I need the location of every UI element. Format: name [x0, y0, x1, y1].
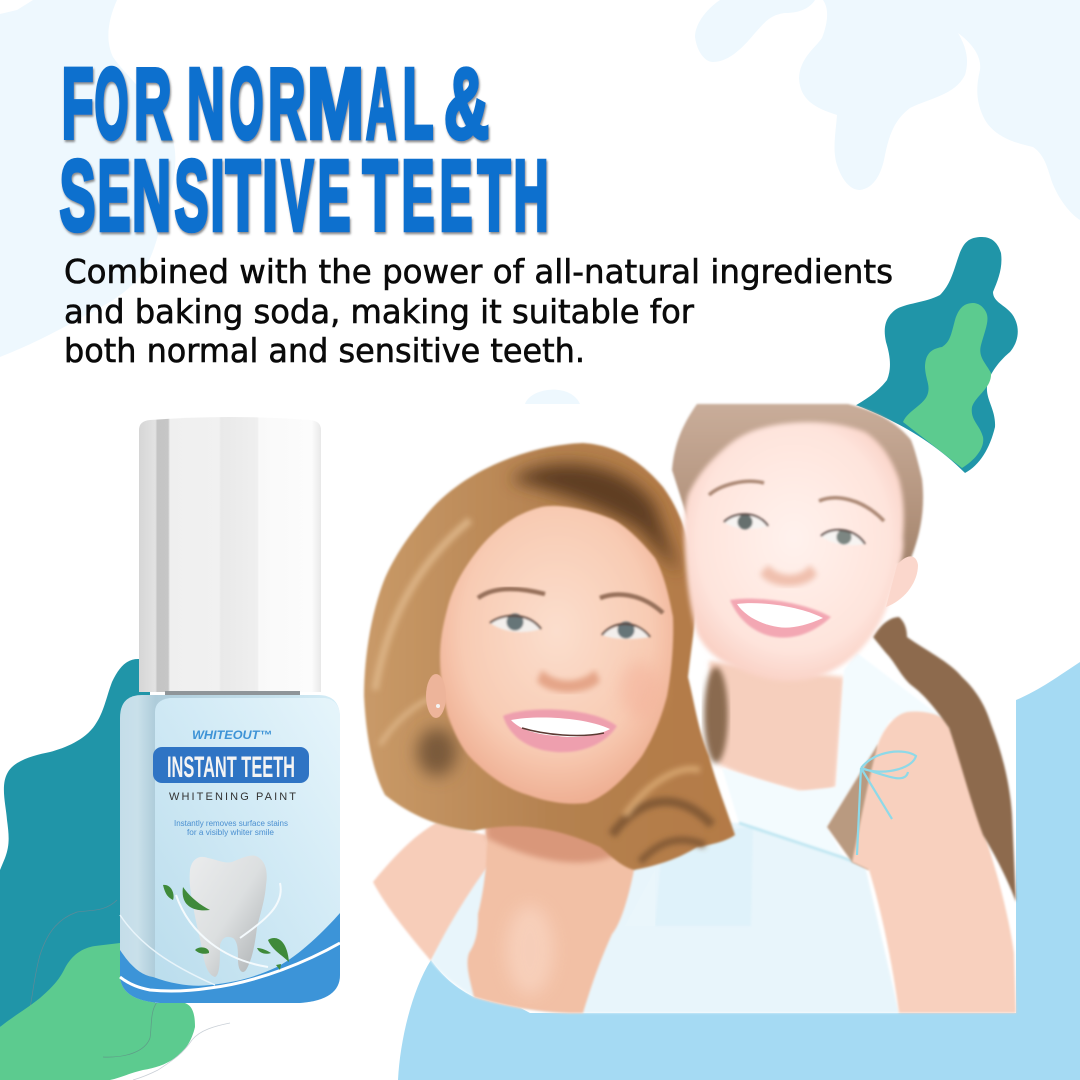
title line 1: N	[187, 48, 225, 160]
blob: green bottom left	[0, 943, 195, 1080]
child's hair	[672, 404, 923, 565]
child's eyes	[724, 514, 865, 545]
child's neck	[709, 661, 844, 795]
child's arm around mother	[373, 823, 492, 961]
title line 1: F	[62, 48, 94, 160]
label pill	[153, 747, 309, 783]
mother's eyes	[490, 614, 650, 639]
title line 1: O	[94, 48, 128, 160]
title line 2: S	[174, 140, 208, 252]
child's face	[684, 422, 904, 681]
title line 2: E	[402, 140, 434, 252]
body text	[64, 252, 893, 370]
child's teeth	[737, 603, 823, 628]
label heading: INSTANT TEETH	[167, 751, 295, 784]
brand name: WHITEOUT™	[192, 728, 272, 742]
bottle body	[120, 695, 340, 1003]
photo: mother and daughter	[360, 404, 1016, 1013]
title line 1	[62, 48, 489, 160]
title line 1: L	[402, 48, 434, 160]
mother's teeth	[511, 717, 610, 737]
title line 1: R	[134, 48, 172, 160]
thin lines on green blob	[103, 1002, 230, 1080]
child's arm	[852, 712, 1016, 1013]
label panel	[155, 698, 340, 1003]
chin shadow	[486, 800, 628, 863]
blob: light blue bottom right	[398, 662, 1080, 1080]
mother's ear	[426, 674, 446, 718]
title line 2	[60, 140, 548, 252]
label description	[174, 819, 288, 837]
neck highlight	[506, 905, 554, 995]
title line 2: V	[282, 140, 314, 252]
mother's cheek blush	[620, 662, 660, 718]
child's brows	[709, 481, 884, 521]
title	[60, 48, 548, 252]
background: pale blue blobs	[0, 0, 1080, 404]
title line 2: S	[60, 140, 96, 252]
thin line on teal blob	[15, 900, 117, 1040]
label description: Instantly removes surface stains	[174, 819, 288, 828]
title line 1: M	[307, 48, 364, 160]
text: H	[514, 140, 548, 252]
body text: Combined with the power of all-natural ingredients	[64, 252, 893, 291]
mother's brows	[478, 589, 663, 613]
mother's lips	[503, 709, 617, 752]
title line 2: T	[226, 140, 260, 252]
cap shadow line	[165, 691, 300, 695]
title line 2: N	[132, 140, 171, 252]
child's arm shadow	[827, 744, 880, 870]
title line 2: E	[98, 140, 130, 252]
swirl around tooth	[176, 883, 281, 967]
mother's hair	[364, 443, 735, 870]
mother's face	[440, 506, 673, 804]
icon: leaves	[163, 885, 289, 970]
title line 2: E	[440, 140, 472, 252]
shirt collar	[655, 827, 753, 926]
title line 2: E	[318, 140, 350, 252]
label description: for a visibly whiter smile	[187, 828, 275, 837]
blob: teal top right	[853, 237, 1018, 473]
blob: green top right	[903, 303, 991, 468]
photo white backing	[360, 404, 1016, 1013]
earring	[436, 704, 440, 708]
child's ear	[886, 556, 918, 607]
mother's neck	[468, 800, 634, 1013]
child's lips	[730, 599, 831, 638]
title line 2: I	[262, 140, 278, 252]
icon: tooth	[190, 856, 267, 977]
label waves	[120, 913, 340, 1003]
shirt shadow band	[739, 823, 865, 866]
mother's hair strands and curls	[375, 520, 712, 862]
body text: both normal and sensitive teeth.	[64, 331, 585, 370]
mother's nose shadow	[537, 670, 600, 692]
title line 2: T	[478, 140, 510, 252]
title line 1: A	[366, 48, 396, 160]
blob: teal left	[0, 659, 150, 1027]
child's neck shadow from hair	[704, 667, 728, 763]
child's ponytail	[873, 617, 1016, 902]
mother's shirt	[431, 819, 899, 1013]
label subheading: WHITENING PAINT	[169, 791, 296, 803]
bottle cap	[139, 417, 321, 692]
title line 2: T	[362, 140, 398, 252]
mother's dark hair shading	[510, 464, 680, 575]
child's nose shadow	[760, 565, 817, 586]
body text: and baking soda, making it suitable for	[64, 292, 694, 331]
mother's hair shadow below ear	[417, 728, 457, 776]
child's shirt	[722, 653, 945, 858]
product bottle	[120, 417, 340, 1003]
title line 2: I	[210, 140, 224, 252]
ribbon on child's shirt	[857, 752, 916, 855]
title line 1: &	[444, 48, 489, 160]
title line 1: R	[268, 48, 306, 160]
title line 1: O	[230, 48, 264, 160]
